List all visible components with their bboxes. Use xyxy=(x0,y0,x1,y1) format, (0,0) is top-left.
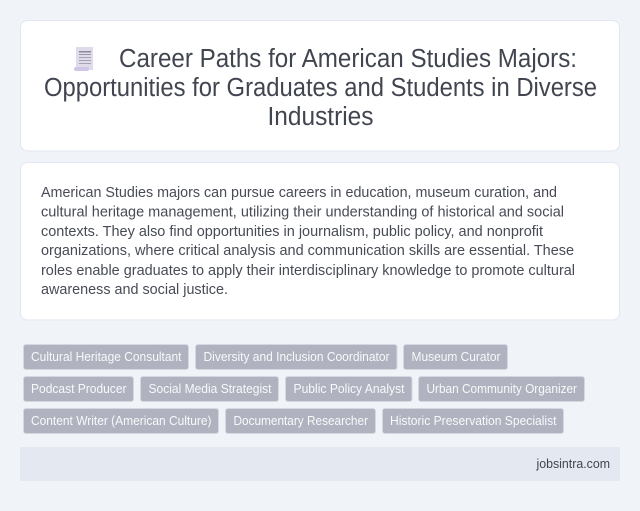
text block: summary: roles enable graduates to apply their interdisciplinary knowledge to promote cultural xyxy=(41,263,575,279)
text block: summary: American Studies majors can pursue careers in education, museum curation, and xyxy=(41,185,557,201)
text block: summary: contexts. They also find opportunities in journalism, public policy, and nonprofit xyxy=(41,224,543,240)
tag: Historic Preservation Specialist xyxy=(382,408,564,434)
tag: Museum Curator: Museum Curator xyxy=(412,349,501,364)
tag: Diversity and Inclusion Coordinator: Diversity and Inclusion Coordinator xyxy=(204,349,390,364)
tag list xyxy=(24,344,584,434)
heading: Industries xyxy=(268,103,374,131)
tag: Documentary Researcher: Documentary Researcher xyxy=(234,413,369,428)
tag: Social Media Strategist: Social Media Strategist xyxy=(148,381,272,396)
text block: summary: awareness and social justice. xyxy=(41,282,228,298)
heading xyxy=(44,45,597,131)
footer source text: jobsintra.com xyxy=(536,456,610,471)
tag: Urban Community Organizer xyxy=(418,376,584,402)
panel: title card xyxy=(20,20,620,151)
tag: Public Policy Analyst: Public Policy Analyst xyxy=(294,381,405,396)
tag: Documentary Researcher xyxy=(226,408,376,434)
panel: summary card xyxy=(20,162,620,320)
icon: paper scroll xyxy=(74,47,93,71)
heading: Opportunities for Graduates and Students in Diverse xyxy=(44,74,597,102)
tag: Content Writer (American Culture): Content Writer (American Culture) xyxy=(31,413,212,428)
tag: Cultural Heritage Consultant xyxy=(24,344,188,370)
heading: Career Paths for American Studies Majors: xyxy=(119,45,577,73)
tag: Content Writer (American Culture) xyxy=(24,408,218,434)
tag: Podcast Producer: Podcast Producer xyxy=(31,381,127,396)
text block: summary: organizations, where critical analysis and communication skills are essential. These xyxy=(41,243,574,259)
tag: Historic Preservation Specialist: Historic Preservation Specialist xyxy=(390,413,557,428)
tag: Social Media Strategist xyxy=(140,376,278,402)
tag: Diversity and Inclusion Coordinator xyxy=(196,344,397,370)
tag: Cultural Heritage Consultant: Cultural Heritage Consultant xyxy=(31,349,182,364)
tag: Public Policy Analyst xyxy=(286,376,412,402)
text block: summary: cultural heritage management, utilizing their understanding of historical and social xyxy=(41,204,564,220)
footer bar xyxy=(20,447,620,481)
text block: summary xyxy=(41,185,575,298)
tag: Museum Curator xyxy=(404,344,508,370)
tag: Urban Community Organizer: Urban Community Organizer xyxy=(426,381,578,396)
tag: Podcast Producer xyxy=(24,376,134,402)
